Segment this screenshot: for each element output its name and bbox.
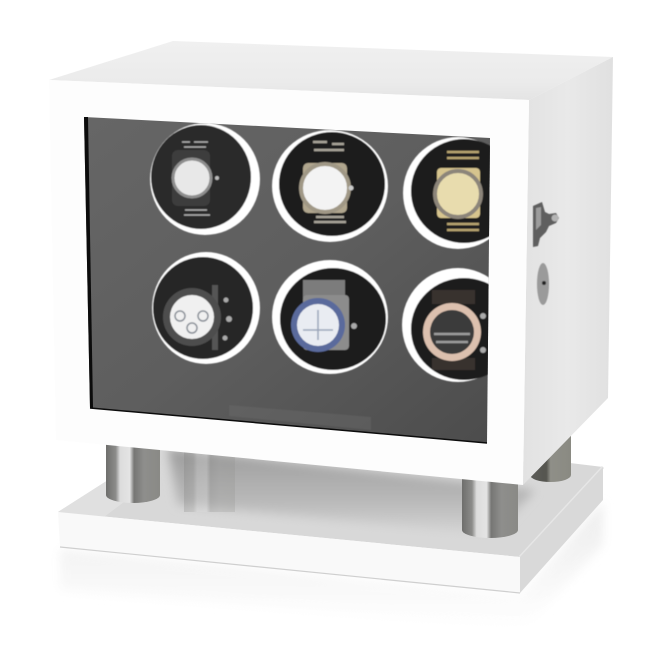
base floor reflection [60, 502, 603, 628]
base rim highlight [520, 467, 603, 557]
window left edge [84, 117, 93, 408]
winder 5 [272, 260, 388, 374]
winder 2 [272, 130, 388, 242]
cabinet front face [49, 80, 529, 485]
reflected leg [184, 445, 235, 512]
glass window [84, 117, 490, 443]
winder 1 [150, 123, 260, 235]
keyhole plate [537, 263, 549, 305]
base reflection of cabinet [168, 448, 535, 535]
glass logo glare [229, 405, 371, 430]
base plinth [58, 445, 603, 593]
base top surface [58, 450, 603, 557]
cabinet side face [523, 57, 613, 485]
winder 6 [401, 267, 489, 383]
hinge latch [533, 202, 559, 247]
base right face [520, 467, 603, 593]
back left leg [106, 435, 160, 503]
winder 4 [152, 252, 260, 364]
back right leg [530, 430, 571, 482]
base front face [58, 512, 520, 593]
window bottom edge [90, 408, 487, 443]
winder rings [150, 123, 517, 382]
winder 3 [402, 136, 490, 250]
product illustration: six-watch winder cabinet [50, 41, 613, 594]
cabinet [49, 41, 613, 485]
front right leg [462, 470, 518, 538]
cabinet top face [49, 41, 613, 100]
